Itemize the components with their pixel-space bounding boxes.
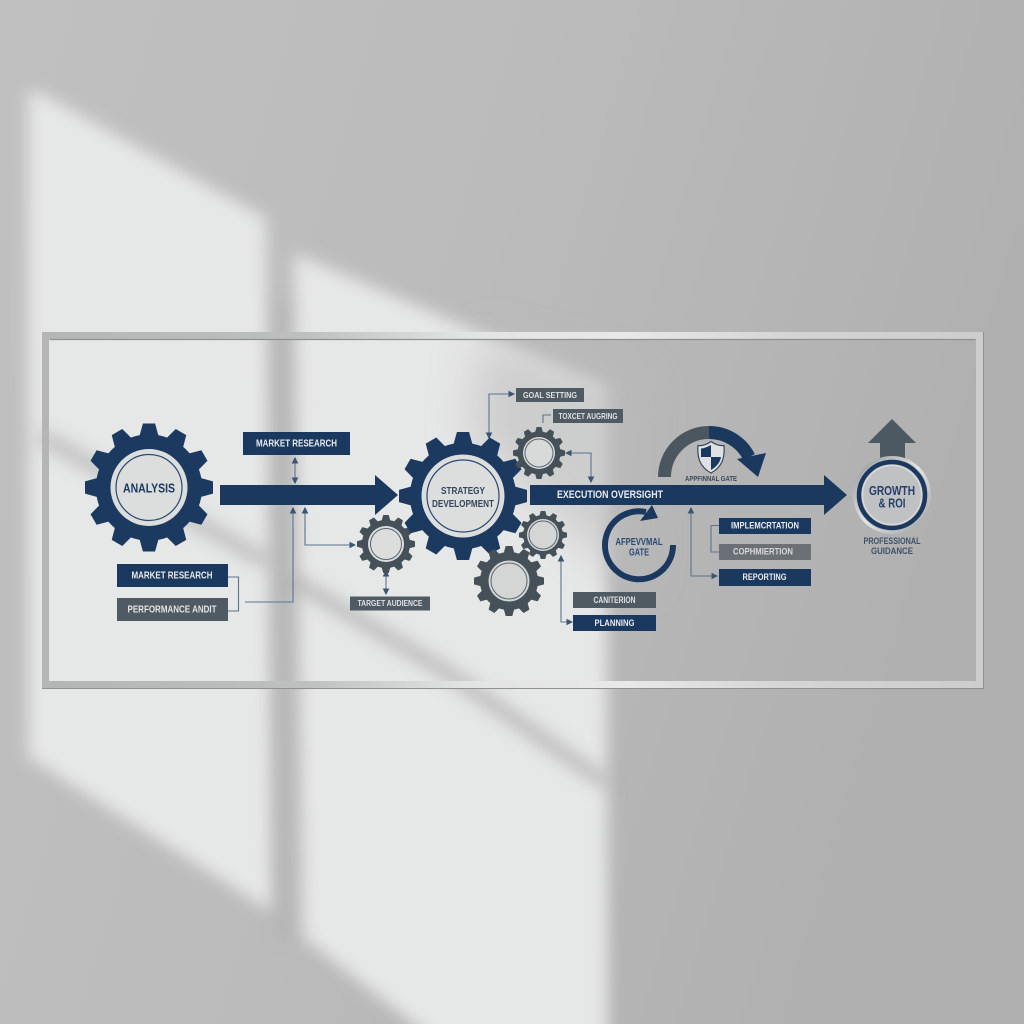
circular arrow: approval gate [605, 505, 673, 579]
framed panel [42, 332, 984, 688]
approval arc with shield: APPFINNAL GATE [685, 476, 737, 483]
icon: shield [698, 442, 724, 473]
gear: upper small [513, 427, 565, 479]
step: analysis gear [85, 424, 213, 552]
box: implementation: IMPLEMCRTATION [731, 520, 799, 532]
connectors: left group [228, 394, 719, 622]
box: optimization [719, 544, 811, 560]
box: canterion [573, 592, 656, 608]
circular arrow: approval gate: GATE [629, 546, 649, 558]
growth and ROI badge: & ROI [878, 496, 906, 510]
approval arc with shield [664, 432, 766, 483]
gear: bottom [474, 546, 544, 616]
box: planning: PLANNING [594, 618, 634, 628]
gear: strategy development: DEVELOPMENT [432, 498, 494, 510]
circular arrow: approval gate: AFPEVVMAL [616, 536, 663, 548]
gear: right small [519, 511, 567, 559]
box: optimization: COPHMIERTION [733, 546, 793, 558]
text: professional guidance: GUIDANCE [871, 546, 913, 556]
box: goal setting: GOAL SETTING [523, 390, 577, 400]
box: market research lower: MARKET RESEARCH [132, 570, 212, 582]
text: professional guidance [864, 536, 921, 556]
box: market research top [243, 432, 350, 455]
box: target audience [350, 596, 430, 610]
step: analysis gear: ANALYSIS [123, 480, 175, 496]
box: target audience: TARGET AUDIENCE [358, 599, 423, 608]
box: performance audit: PERFORMANCE ANDIT [128, 604, 217, 616]
gear: strategy development: STRATEGY [441, 485, 485, 497]
box: target auditing: TOXCET AUGRING [558, 411, 618, 421]
box: planning [573, 615, 656, 631]
growth and ROI badge: GROWTH [869, 484, 915, 498]
gear: strategy development [399, 432, 527, 560]
arrow: analysis to strategy [220, 475, 398, 515]
icon: growth arrow [868, 419, 916, 462]
arrow: execution oversight: EXECUTION OVERSIGHT [557, 489, 663, 501]
box: canterion: CANITERION [594, 595, 636, 605]
box: target auditing [553, 409, 623, 423]
gear: target audience [357, 515, 415, 573]
box: implementation [719, 518, 811, 534]
box: market research lower [117, 564, 228, 587]
box: reporting [719, 569, 811, 586]
arrow: execution oversight [530, 475, 847, 515]
box: market research top: MARKET RESEARCH [256, 438, 337, 450]
text: professional guidance: PROFESSIONAL [864, 536, 921, 546]
box: goal setting [516, 388, 584, 402]
growth and ROI badge [854, 458, 930, 532]
box: reporting: REPORTING [742, 572, 786, 583]
box: performance audit [117, 598, 228, 621]
